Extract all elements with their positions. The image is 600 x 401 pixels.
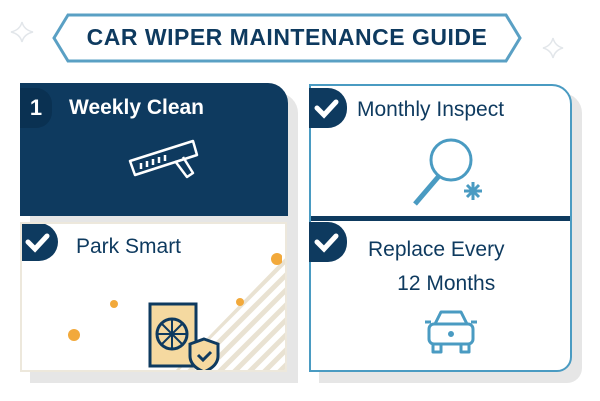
icon: sun shade with shield <box>68 253 282 370</box>
heading: replace: Replace Every <box>368 238 505 261</box>
divider bar <box>311 216 570 221</box>
icon: magnifier and snowflake <box>413 138 482 206</box>
title banner: CAR WIPER MAINTENANCE GUIDE <box>87 24 487 50</box>
panel: park smart <box>20 222 287 372</box>
icon: car <box>425 310 477 354</box>
check badge <box>309 222 347 262</box>
heading: Weekly Clean <box>69 96 204 119</box>
panel: monthly inspect / replace <box>309 84 572 372</box>
icon: wiper blade <box>128 140 198 178</box>
title banner <box>52 14 522 62</box>
panel: weekly clean <box>20 83 288 216</box>
number badge: 1 <box>30 95 42 120</box>
check badge <box>20 223 58 261</box>
check badge <box>309 88 347 128</box>
heading: replace <box>368 238 505 295</box>
shadows <box>30 93 298 383</box>
number badge <box>20 88 52 128</box>
heading: Park Smart <box>76 235 181 258</box>
heading: monthly inspect: Monthly Inspect <box>357 98 504 121</box>
diagonal stripes <box>176 258 285 370</box>
heading: replace: 12 Months <box>397 272 495 295</box>
